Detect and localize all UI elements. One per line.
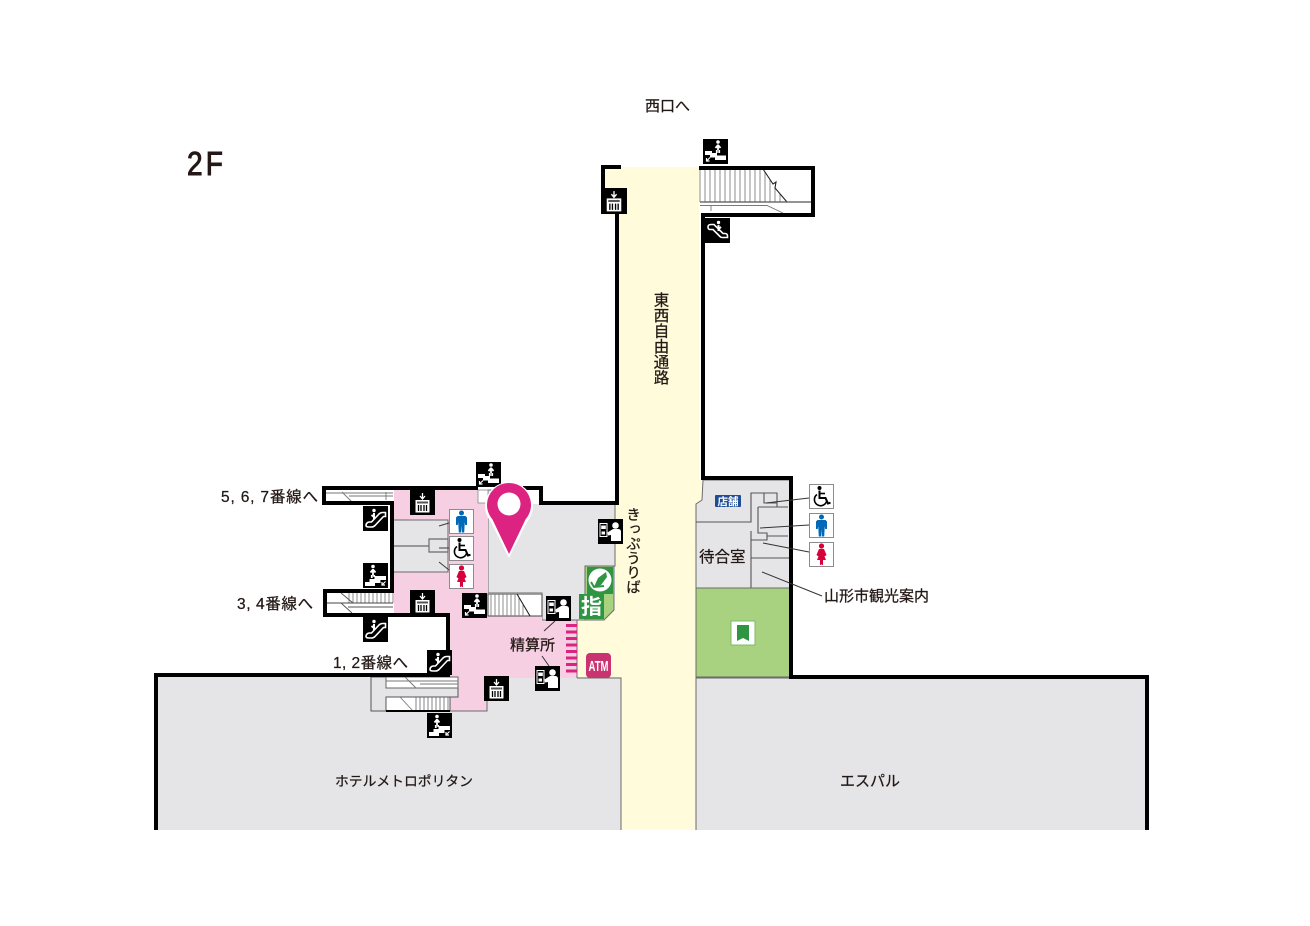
panel: hotel metropolitan building <box>156 677 621 830</box>
icon: green bookmark <box>731 621 755 645</box>
label: lines 3 4: 3, 4番線へ <box>237 595 313 613</box>
wall: station outline <box>156 167 1147 830</box>
stairs: lines 3 4 <box>327 593 394 613</box>
label: fare adjustment: 精算所 <box>510 636 555 654</box>
icon: elevator 5 6 7 <box>410 490 435 515</box>
icon: stairs lower <box>427 713 452 738</box>
label: espal: エスパル <box>840 773 900 790</box>
icon: women restroom left <box>450 564 474 588</box>
label: lines 1 2: 1, 2番線へ <box>333 654 408 672</box>
icon: staff ticket office <box>598 519 623 544</box>
leader lines <box>542 498 822 666</box>
panel: gray concourse room <box>488 490 615 620</box>
icon: escalator 3 4 <box>363 617 388 642</box>
icon: accessible restroom left <box>450 536 474 560</box>
icon: elevator lower <box>484 676 509 701</box>
icon: reserved seat sales <box>579 567 613 619</box>
panel: green shop room <box>696 588 790 677</box>
icon: location pin <box>485 482 533 558</box>
corridor: east-west passage <box>577 167 702 830</box>
icon: ATM <box>586 653 611 678</box>
label: kippu uriba vertical: きっぷうりば <box>624 507 640 594</box>
panel: waiting room interior <box>696 493 789 588</box>
panel: green reserved seat room <box>585 566 614 620</box>
icon: escalator top <box>705 218 730 243</box>
icon: elevator 3 4 <box>410 590 435 615</box>
icon: men restroom left <box>450 510 474 534</box>
icon: stairs 3 4 <box>363 563 388 588</box>
label: east-west passage vertical: 東西自由通路 <box>652 292 669 385</box>
icon: staff fare adjustment lower <box>535 666 560 691</box>
panel: waiting room <box>696 480 790 588</box>
stairs: lines 5 6 7 <box>326 490 394 502</box>
icon: shop badge: 店舗 <box>718 495 739 508</box>
stairs: west exit <box>700 169 811 213</box>
icon: staff fare adjustment upper <box>546 596 571 621</box>
pink area edge <box>450 620 577 711</box>
icon: reserved seat sales: 指 <box>581 596 602 619</box>
icon: ATM: ATM <box>588 659 608 675</box>
label: lines 5 6 7: 5, 6, 7番線へ <box>221 488 318 506</box>
label: tourist info: 山形市観光案内 <box>824 588 929 605</box>
magenta tactile stripes <box>566 624 577 672</box>
icon: elevator top <box>601 188 627 214</box>
icon: stairs concourse <box>462 593 487 618</box>
icon: women restroom right <box>810 542 834 566</box>
icon: escalator 1 2 <box>427 650 452 675</box>
panel: pink paid area <box>393 490 577 711</box>
label: to west exit: 西口へ <box>645 98 690 115</box>
building edge lines <box>577 678 790 830</box>
icon: escalator 5 6 7 <box>363 506 388 531</box>
stairs: lower exit to lines 1 2 <box>371 677 458 711</box>
icon: accessible restroom right <box>810 484 834 508</box>
stairs: upper pink stub <box>478 490 540 504</box>
icon: stairs top <box>703 139 728 164</box>
panel: espal building <box>696 678 1147 830</box>
title: floor label: 2F <box>187 146 223 183</box>
stairs: concourse <box>488 594 542 616</box>
label: waiting room: 待合室 <box>699 548 746 566</box>
label: hotel metropolitan: ホテルメトロポリタン <box>335 774 473 789</box>
icon: stairs upper <box>476 462 501 487</box>
panel: restroom block left <box>393 520 449 572</box>
icon: men restroom right <box>810 514 834 538</box>
